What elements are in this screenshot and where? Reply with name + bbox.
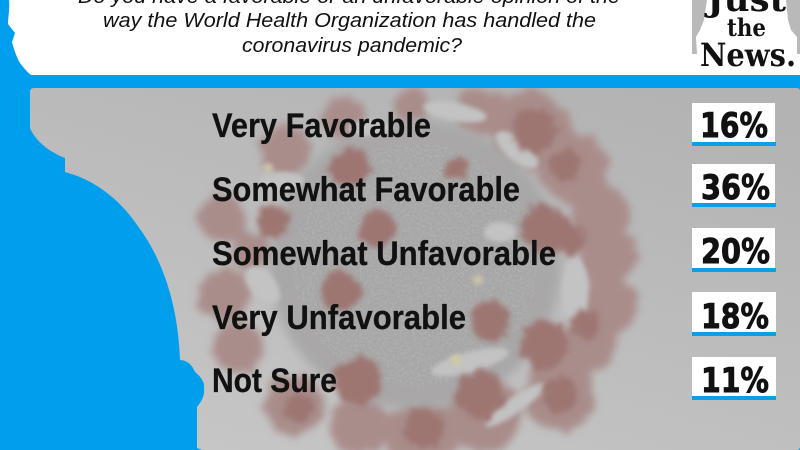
response labels: Very Favorable: [212, 107, 431, 145]
response labels: Not Sure: [212, 362, 337, 400]
logo: Just the News: [692, 0, 800, 74]
value badge 36%: 36%: [701, 168, 770, 208]
question text: [78, 0, 620, 57]
question text: coronavirus pandemic?: [242, 34, 463, 57]
white header panel: [8, 0, 800, 75]
logo wordmark: the: [727, 13, 766, 42]
response labels: [212, 107, 556, 400]
question text: way the World Health Organization has handled the: [103, 9, 596, 32]
logo capitol silhouette: [692, 0, 800, 54]
coronavirus image: [198, 88, 638, 450]
response labels: Somewhat Unfavorable: [212, 235, 556, 273]
response labels: Somewhat Favorable: [212, 171, 520, 209]
value badge 18%: 18%: [701, 297, 769, 337]
value badge 16%: 16%: [700, 106, 768, 146]
value badge 11%: 11%: [701, 361, 769, 401]
value badge 20%: 20%: [701, 232, 770, 272]
response labels: Very Unfavorable: [212, 299, 466, 337]
gray photo panel: [30, 88, 800, 450]
logo wordmark: [700, 0, 796, 74]
